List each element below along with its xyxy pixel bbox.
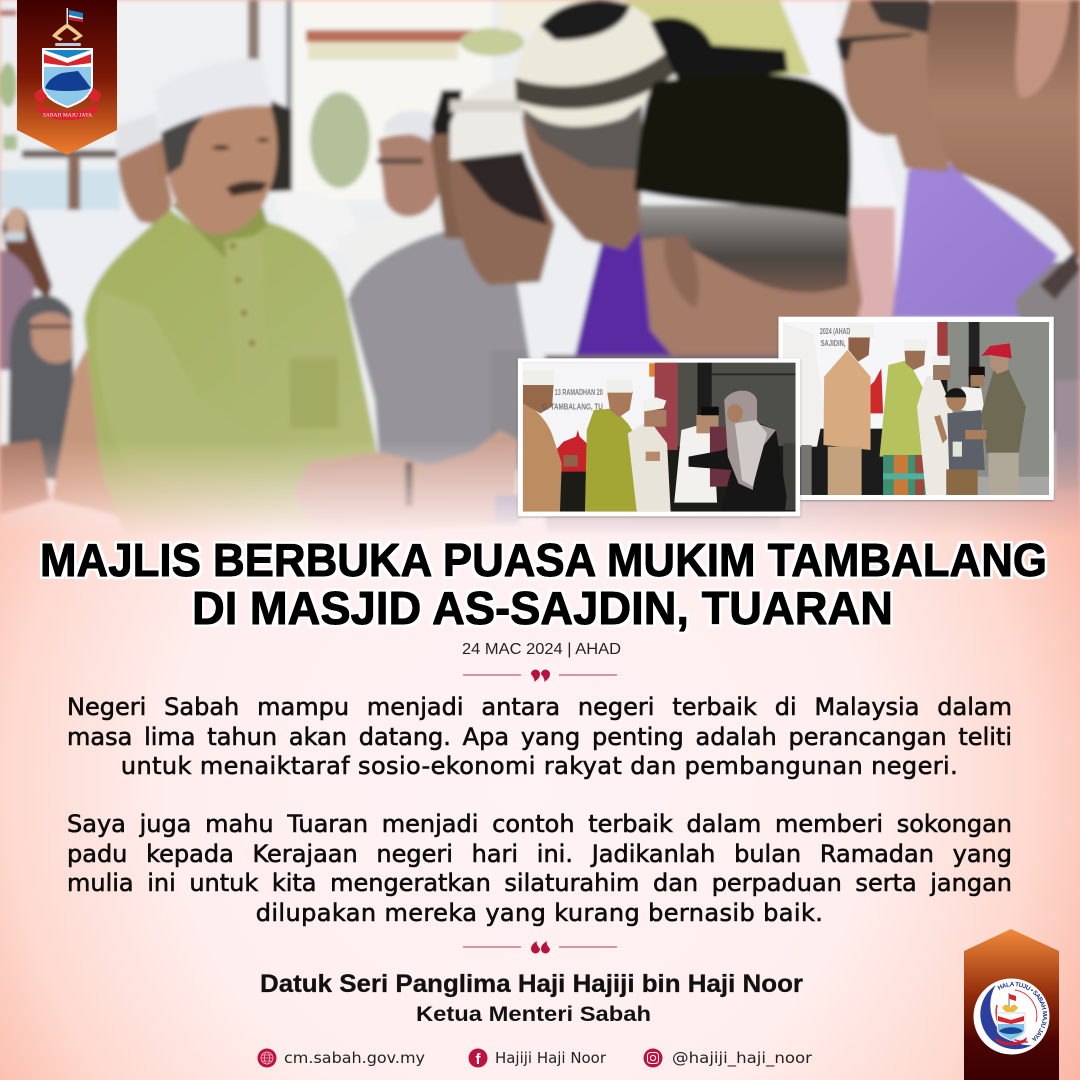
icon: globe (258, 1048, 276, 1068)
dark songkok behind (650, 17, 788, 85)
background women at left (0, 207, 75, 515)
emblem roundel (974, 978, 1050, 1054)
quote paragraph 2: mulia ini untuk kita mengeratkan silaturahim dan perpaduan serta jangan (67, 869, 1012, 897)
photo backdrop (0, 0, 1080, 540)
quote paragraph 1: Negeri Sabah mampu menjadi antara negeri terbaik di Malaysia dalam (67, 693, 1012, 721)
footer: Instagram: @hajiji_haji_noor (672, 1049, 813, 1068)
quote paragraph 2: Saya juga mahu Tuaran menjadi contoh terbaik dalam memberi sokongan (67, 810, 1012, 838)
guest in grey shirt (348, 90, 550, 470)
divider with closing quote mark (463, 941, 617, 954)
footer: website: cm.sabah.gov.my (284, 1049, 425, 1067)
guest with black songkok, back view (634, 74, 862, 365)
quote paragraph 2: padu kepada Kerajaan negeri hari ini. Jadikanlah bulan Ramadan yang (67, 840, 1012, 868)
guest in lilac shirt with glasses (836, 0, 1058, 318)
name of speaker: Datuk Seri Panglima Haji Hajiji bin Haji Noor (260, 970, 803, 998)
footer: Facebook: Hajiji Haji Noor (495, 1049, 607, 1067)
icon: flag and crest hands (52, 8, 83, 46)
quote paragraph 1: masa lima tahun akan datang. Apa yang penting adalah perancangan teliti (67, 722, 1012, 750)
icon: motto ribbon (34, 88, 101, 120)
footer: Instagram (644, 1048, 813, 1068)
quote paragraph 1: untuk menaiktaraf sosio-ekonomi rakyat dan pembangunan negeri. (121, 752, 958, 780)
icon: crest shield (42, 48, 93, 108)
inset photo: guest receiving envelope (518, 358, 800, 516)
guest with crochet cap (515, 0, 676, 250)
main figure in green baju (84, 59, 378, 540)
guest with white cap behind (52, 112, 172, 520)
inset photo: boy and guest receiving gift: SAJIDIN, (821, 338, 846, 348)
inset photo: boy and guest receiving gift (778, 317, 1054, 500)
title: DI MASJID AS-SAJDIN, TUARAN (192, 582, 893, 634)
inset photo: guest receiving envelope: G. TAMBALANG, TU (542, 402, 603, 411)
emblem roundel: HALA TUJU • SABAH MAJU JAYA (998, 982, 1048, 1041)
icon: motto ribbon: SABAH MAJU JAYA (43, 112, 92, 118)
shaking hands (293, 430, 520, 535)
date: 24 MAC 2024 | AHAD (462, 641, 621, 658)
divider with opening quote mark (463, 670, 617, 682)
photo: Chief Minister greeting guests (0, 0, 1080, 540)
quote paragraph 2 (67, 810, 1012, 926)
quote paragraph 2: dilupakan mereka yang kurang bernasib baik. (256, 898, 823, 926)
inset photo: boy and guest receiving gift: 2024 (AHAD (820, 326, 850, 336)
position of speaker: Ketua Menteri Sabah (416, 1003, 651, 1026)
logo pennant: Sabah crest (17, 0, 117, 155)
guest close-up at far right (927, 0, 1080, 520)
icon: Instagram (644, 1048, 662, 1068)
inset photo: guest receiving envelope: 13 RAMADHAN 20 (555, 387, 603, 397)
icon: Facebook: f (476, 1051, 482, 1068)
logo pennant: Hala Tuju emblem (964, 929, 1059, 1080)
quote paragraph 1 (67, 693, 1012, 780)
guests in white behind (266, 98, 442, 220)
guest with white cap, back view (446, 80, 558, 358)
lower bodies behind insets (545, 355, 785, 535)
guest in dark purple (572, 224, 674, 358)
title: MAJLIS BERBUKA PUASA MUKIM TAMBALANG (40, 534, 1047, 586)
title (40, 534, 1047, 634)
